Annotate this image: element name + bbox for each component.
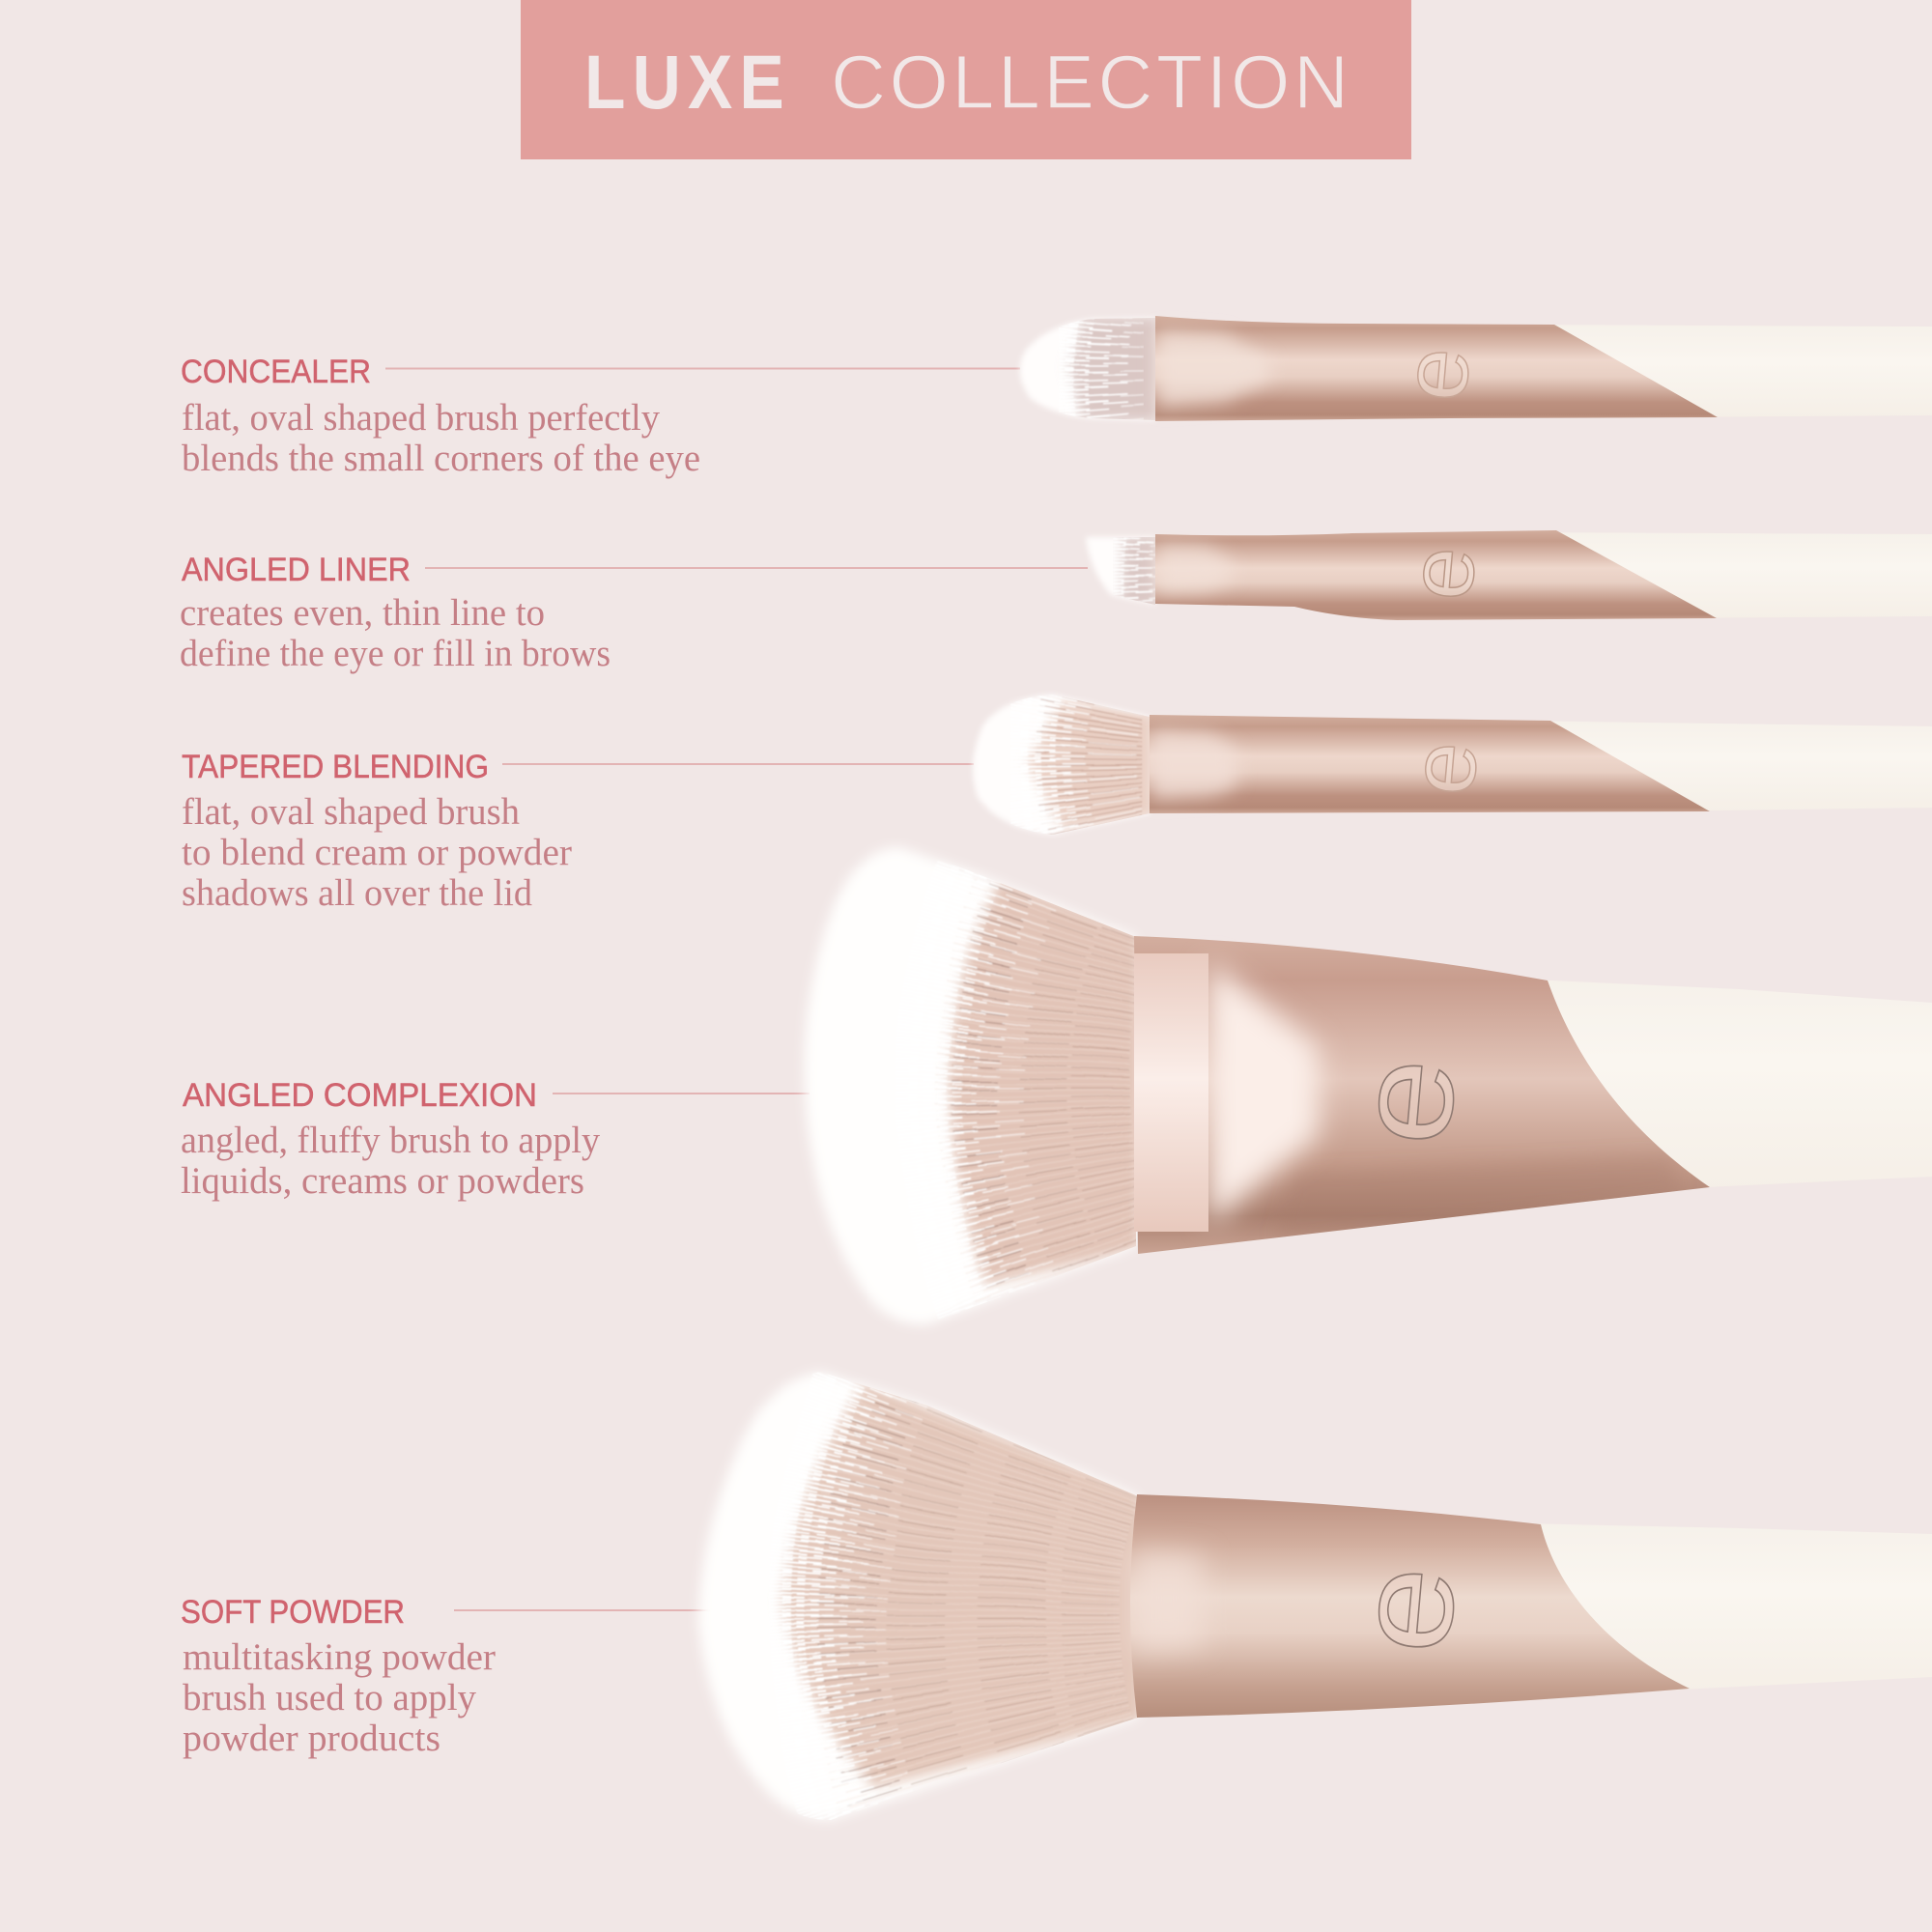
callout: concealer: CONCEALER (181, 354, 371, 390)
ferrule panel (1134, 953, 1208, 1232)
callout: tapered blending: flat, oval shaped brush (182, 791, 520, 833)
callout: soft powder: brush used to apply (183, 1677, 476, 1719)
logo: e (1389, 543, 1495, 604)
handle (1478, 1522, 1932, 1692)
title: collection: COLLECTION (831, 39, 1349, 125)
callout: angled complexion: angled, fluffy brush to apply (181, 1120, 600, 1161)
logo: e (1326, 1560, 1484, 1659)
ferrule highlight (1208, 961, 1319, 1225)
callout: tapered blending: shadows all over the lid (182, 872, 532, 914)
handle (1507, 532, 1932, 618)
callout: concealer (181, 354, 1020, 479)
bristles (1016, 317, 1155, 421)
callout: tapered blending: TAPERED BLENDING (182, 749, 489, 785)
callout: angled complexion: ANGLED COMPLEXION (183, 1077, 537, 1114)
callout: angled complexion (181, 1077, 810, 1202)
callout: concealer: flat, oval shaped brush perfectly (182, 397, 660, 439)
brush: soft powder (692, 1371, 1932, 1822)
callout: angled liner (180, 552, 1088, 674)
callout: angled liner: creates even, thin line to (180, 592, 545, 634)
title: luxe: LUXE (584, 40, 784, 125)
ferrule shadow (1567, 1161, 1662, 1175)
ferrule highlight (1157, 545, 1232, 593)
bristles (798, 846, 1138, 1326)
callout: angled liner: ANGLED LINER (182, 552, 411, 588)
callout: soft powder: multitasking powder (183, 1636, 496, 1678)
brush: angled complexion (798, 846, 1932, 1326)
bristles (970, 694, 1150, 835)
title banner (521, 0, 1411, 159)
callout: soft powder (181, 1594, 710, 1759)
handle (1507, 325, 1932, 417)
bristles (1086, 536, 1155, 605)
ferrule highlight (1157, 330, 1270, 408)
ferrule highlight (1132, 1550, 1203, 1652)
ferrule (1155, 530, 1717, 620)
callout: tapered blending (182, 749, 974, 914)
ferrule highlight (1151, 730, 1236, 800)
handle (1488, 978, 1932, 1190)
callout: soft powder: SOFT POWDER (181, 1594, 405, 1631)
logo: e (1383, 344, 1490, 405)
logo: e (1391, 738, 1497, 799)
callout: tapered blending: to blend cream or powder (182, 832, 572, 873)
brush: tapered blending (973, 616, 1932, 910)
callout: angled liner: define the eye or fill in brows (180, 633, 611, 674)
ferrule (1130, 1494, 1690, 1718)
logo: e (1326, 1052, 1484, 1151)
callout: concealer: blends the small corners of the eye (182, 438, 700, 479)
ferrule (1134, 936, 1710, 1254)
ferrule (1155, 316, 1718, 421)
brush: angled liner (1086, 530, 1932, 620)
callout: angled complexion: liquids, creams or powders (181, 1160, 584, 1202)
bristles (692, 1371, 1137, 1822)
brush: concealer (1016, 316, 1932, 421)
ferrule (1150, 715, 1710, 813)
callout: soft powder: powder products (183, 1718, 440, 1759)
handle (1507, 721, 1932, 811)
